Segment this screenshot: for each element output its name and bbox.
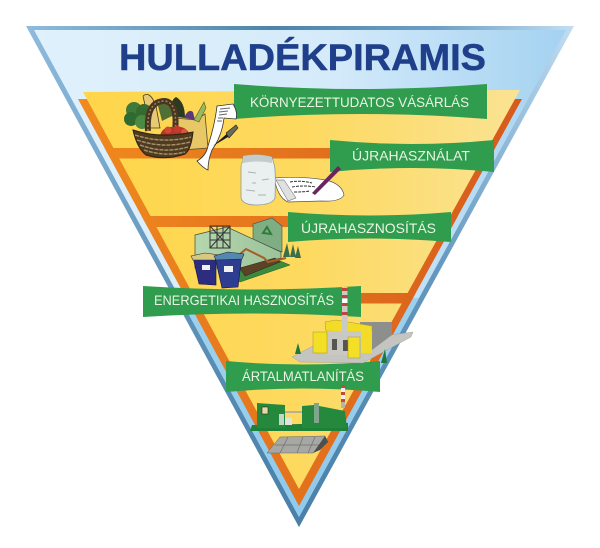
label: Energetikai hasznosítás: [143, 286, 361, 317]
label: Környezettudatos vásárlás: KÖRNYEZETTUDATOS VÁSÁRLÁS: [250, 93, 469, 110]
label: Újrahasználat: [330, 140, 494, 172]
label: Ártalmatlanítás: ÁRTALMATLANÍTÁS: [242, 368, 364, 384]
label: Környezettudatos vásárlás: [234, 84, 487, 119]
label: Újrahasznosítás: ÚJRAHASZNOSÍTÁS: [301, 220, 436, 236]
icon: recycling plant and bins: [191, 218, 301, 288]
icon: waste-to-energy power plant: [292, 287, 413, 363]
icon: glass jar and handwritten note: [241, 155, 344, 205]
level divider bands: [104, 148, 496, 304]
label: Újrahasznosítás: [288, 212, 451, 242]
label: Energetikai hasznosítás: ENERGETIKAI HASZNOSÍTÁS: [154, 292, 334, 308]
label: Ártalmatlanítás: [226, 361, 380, 392]
label: Újrahasználat: ÚJRAHASZNÁLAT: [352, 148, 471, 164]
icon: disposal plant and landfill: [250, 385, 348, 453]
icon: shopping basket and receipt: [124, 94, 238, 170]
title: HULLADÉKPIRAMIS: [119, 37, 486, 78]
